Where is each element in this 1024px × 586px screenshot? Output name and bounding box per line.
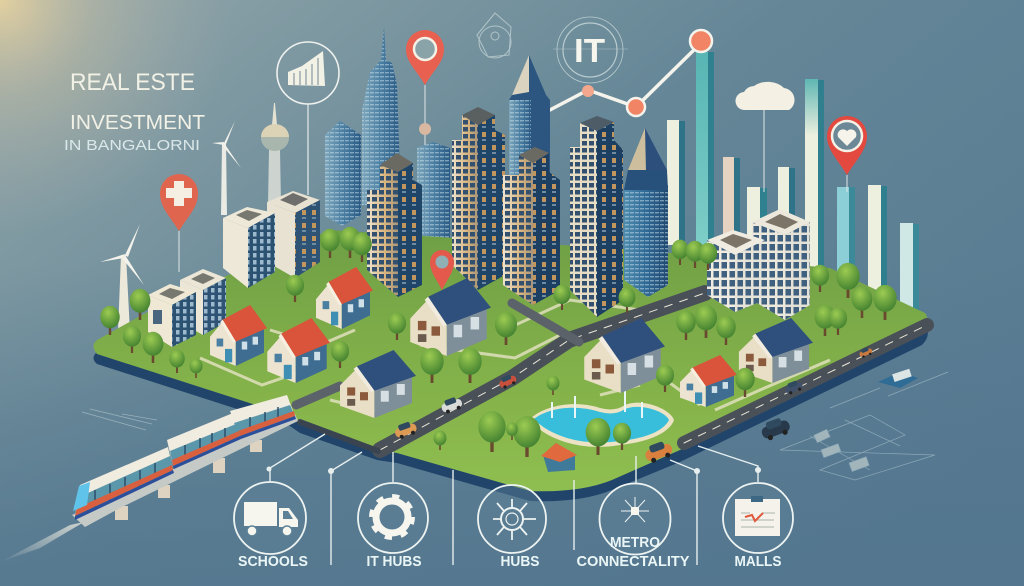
ghost blueprint block xyxy=(878,369,948,396)
houses xyxy=(210,267,813,472)
ghost track lines xyxy=(82,409,157,430)
icon: heart map pin xyxy=(827,116,867,192)
ground platform xyxy=(94,230,928,501)
icon: cloud xyxy=(735,82,795,192)
roads xyxy=(296,293,927,451)
icon: medical map pin xyxy=(160,174,198,272)
bar chart xyxy=(667,52,919,313)
ghost floor plan xyxy=(780,388,935,480)
central towers xyxy=(367,107,668,317)
back glass towers xyxy=(325,27,550,262)
icon: building chart circle xyxy=(277,42,339,195)
label: IT hubs: IT HUBS xyxy=(366,553,422,570)
title xyxy=(64,69,205,154)
title: INVESTMENT xyxy=(70,112,205,134)
connector lines xyxy=(266,434,761,565)
label: schools: SCHOOLS xyxy=(238,553,308,570)
icon: network compass xyxy=(477,13,511,58)
pool with fountains xyxy=(530,390,674,447)
icon: hubs xyxy=(478,485,546,553)
trees xyxy=(100,227,897,457)
icon: schools truck xyxy=(234,482,306,554)
wind turbines and TV tower xyxy=(100,103,289,332)
label: malls: MALLS xyxy=(734,553,782,570)
label: metro: METRO xyxy=(610,534,660,551)
walkways xyxy=(200,300,830,412)
icon: IT hubs gear xyxy=(358,483,428,553)
map pin on house xyxy=(430,250,454,290)
right buildings xyxy=(707,209,810,320)
icon: IT badge: IT xyxy=(574,32,605,69)
title: REAL ESTE xyxy=(70,69,195,96)
icon: malls board xyxy=(723,483,793,553)
left buildings xyxy=(148,191,320,347)
label: connectality: CONNECTALITY xyxy=(576,553,690,570)
cars xyxy=(393,346,873,465)
metro train xyxy=(73,395,296,520)
label: hubs: HUBS xyxy=(500,553,540,570)
icon: metro connectivity xyxy=(600,484,670,554)
elevated rail viaduct xyxy=(0,414,298,562)
icon: map pin top xyxy=(406,30,444,145)
title: IN BANGALORNI xyxy=(64,137,200,154)
icon: IT badge xyxy=(553,17,628,83)
line chart xyxy=(548,30,712,116)
